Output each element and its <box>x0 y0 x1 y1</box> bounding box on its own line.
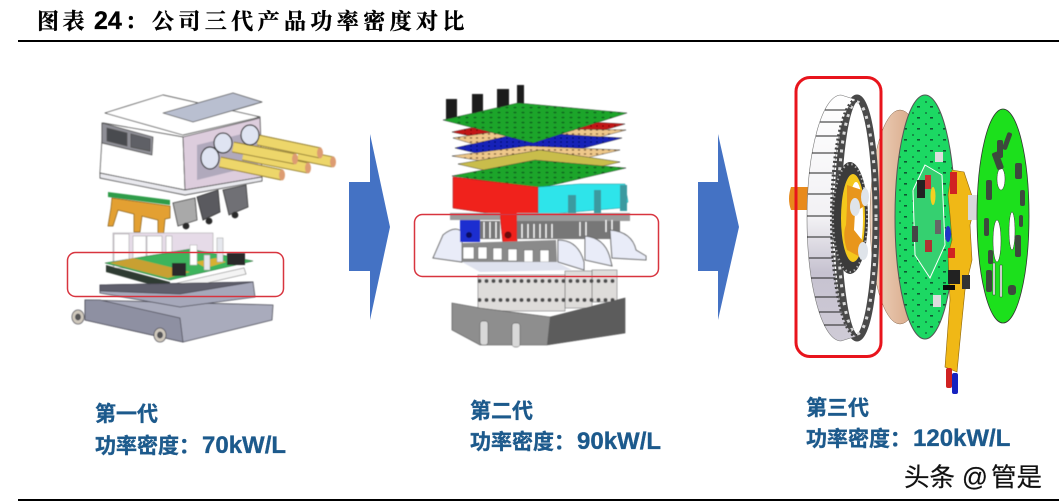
label: first generation <box>95 403 286 459</box>
grey band and fins <box>450 213 630 239</box>
grey tray <box>452 298 625 347</box>
red highlight box: first generation <box>68 252 284 296</box>
bottom rule <box>18 499 1059 501</box>
label: third generation: 第三代 <box>806 397 869 420</box>
label: third generation: 120kW/L <box>913 425 1010 452</box>
device: second generation exploded view <box>433 85 646 347</box>
blue terminal block <box>460 220 480 242</box>
red highlight box: third generation <box>796 78 881 356</box>
device: first generation exploded view <box>72 93 336 342</box>
housing <box>100 93 262 195</box>
device: third generation exploded view <box>789 95 1029 394</box>
watermark: 管是 <box>991 464 1042 492</box>
base housing <box>72 282 273 342</box>
red stem bolt <box>504 232 512 238</box>
watermark: 头条 <box>904 464 955 492</box>
capacitors <box>113 233 213 268</box>
title: 公司三代产品功率密度对比 <box>152 9 469 34</box>
white coolant arches <box>433 229 646 270</box>
perforated cooling plates <box>478 270 617 311</box>
label: first generation: 第一代 <box>95 403 158 426</box>
label: second generation <box>470 400 661 455</box>
large green circuit disc <box>895 95 955 339</box>
red highlight box: second generation <box>414 214 658 276</box>
yellow bracket with wires <box>943 170 978 394</box>
power board with components <box>105 238 253 290</box>
title: 24 <box>94 7 122 35</box>
black pins <box>446 85 524 121</box>
watermark: @ <box>962 464 988 492</box>
label: first generation: 70kW/L <box>202 432 286 459</box>
title: 图表 <box>37 9 88 34</box>
shaft <box>789 187 810 210</box>
magnet ring band <box>807 95 857 341</box>
label: second generation: 90kW/L <box>577 428 661 455</box>
cable glands and yellow cables <box>197 125 336 180</box>
copper drum <box>870 110 930 324</box>
arrow 1 <box>349 134 390 320</box>
label: second generation: 第二代 <box>470 400 533 423</box>
gold bracket and green strip <box>108 192 170 240</box>
label: first generation: 功率密度： <box>95 434 200 458</box>
label: third generation: 功率密度： <box>806 427 911 451</box>
far toothed ring <box>838 98 876 338</box>
stacked circuit boards <box>443 103 627 188</box>
red busbar <box>453 177 538 244</box>
small green disc <box>977 109 1029 323</box>
dark terminal modules <box>173 185 248 229</box>
label: second generation: 功率密度： <box>470 430 575 454</box>
rotor hub <box>832 162 869 274</box>
arrow 2 <box>698 134 739 320</box>
label: third generation <box>806 397 1010 452</box>
power module row <box>462 240 572 272</box>
cyan blocks <box>538 184 628 221</box>
top rule <box>18 40 1059 42</box>
title: ： <box>125 9 147 34</box>
